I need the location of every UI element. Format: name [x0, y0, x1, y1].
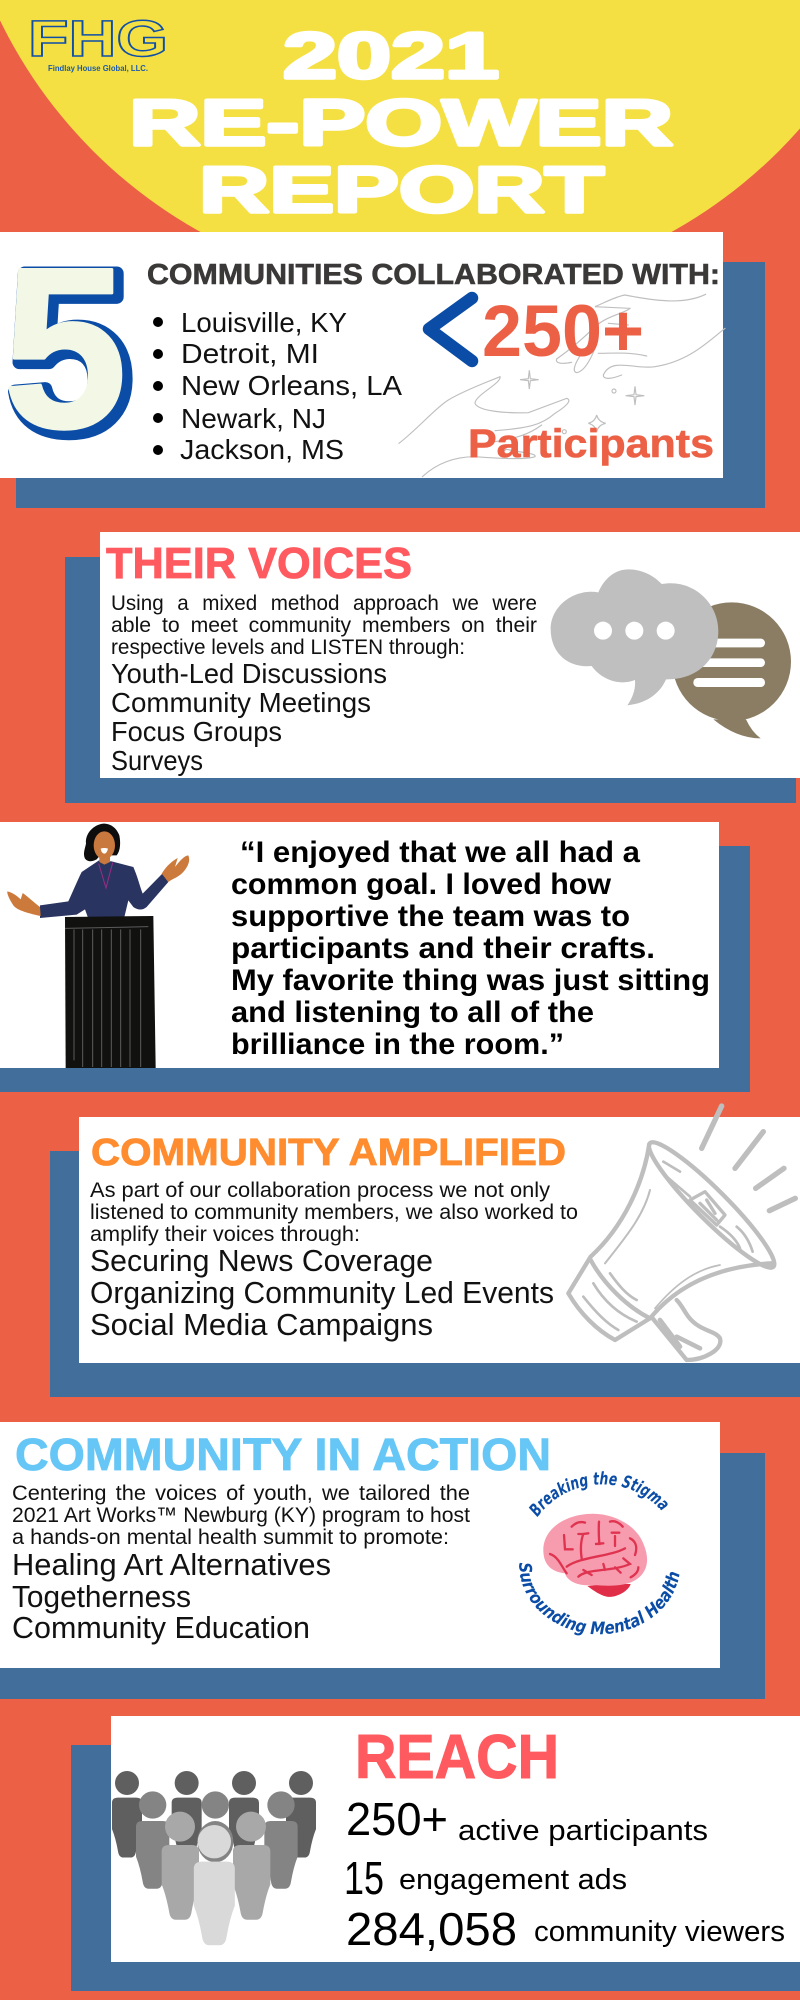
list of cities: Detroit, MI: [181, 338, 319, 369]
heading: their voices: THEIR VOICES: [106, 539, 412, 588]
list: amplification methods: Securing News Coverage: [90, 1243, 433, 1278]
text: collaboration description: As part of our collaboration process we not only: [90, 1179, 551, 1202]
icon: crowd of people: [112, 1771, 316, 1945]
quote text: supportive the team was to: [231, 900, 630, 933]
header: yellow semicircle: [0, 0, 800, 293]
quote text: [231, 836, 710, 1061]
text: collaboration description: [90, 1179, 578, 1246]
label: participants: Participants: [468, 422, 714, 466]
text: program description: Centering the voices of youth, we tailored the: [12, 1482, 470, 1505]
list of cities: Louisville, KY: [181, 307, 347, 338]
icon: brain badge with circular text: [519, 1471, 680, 1636]
list: listening methods: Surveys: [111, 745, 203, 776]
stat: community viewers: community viewers: [534, 1916, 785, 1948]
icon: brain badge with circular text: Surrounding Mental Health: [519, 1562, 680, 1636]
list: amplification methods: Organizing Community Led Events: [90, 1275, 554, 1310]
quote text: and listening to all of the: [231, 996, 594, 1029]
list: listening methods: [111, 658, 387, 776]
quote text: common goal. I loved how: [231, 868, 612, 901]
logo: Findlay House Global: [28, 10, 168, 73]
text: method description: Using a mixed method approach we were: [111, 592, 537, 615]
heading: communities collaborated: COMMUNITIES COLLABORATED WITH:: [147, 259, 720, 291]
title: REPORT: [199, 153, 604, 226]
panel: community in action: [0, 1422, 765, 1699]
text: program description: [12, 1482, 470, 1549]
text: method description: able to meet community members on their: [111, 614, 537, 637]
stat: active participants: [346, 1793, 708, 1847]
panel: testimonial quote: [0, 822, 750, 1092]
list: listening methods: Community Meetings: [111, 687, 371, 718]
list: summit goals: Healing Art Alternatives: [12, 1547, 331, 1582]
text: method description: respective levels and LISTEN through:: [111, 636, 465, 659]
list of cities: Newark, NJ: [181, 403, 326, 434]
quote text: My favorite thing was just sitting: [231, 964, 710, 997]
text: method description: [111, 592, 537, 659]
icon: less-than chevron: [429, 298, 472, 361]
illustration: speaker at podium: [7, 824, 189, 1068]
list: amplification methods: [90, 1243, 554, 1342]
title: 2021: [283, 19, 499, 92]
icon: brain badge with circular text: Breaking the Stigma: [528, 1471, 668, 1517]
heading: reach: REACH: [355, 1723, 559, 1792]
panel: community amplified: [50, 1106, 800, 1397]
text: collaboration description: amplify their voices through:: [90, 1223, 360, 1246]
list of cities: Jackson, MS: [180, 434, 344, 465]
text: program description: a hands-on mental health summit to promote:: [12, 1526, 449, 1549]
stat: engagement ads: 15: [344, 1852, 384, 1904]
list: summit goals: Community Education: [12, 1610, 310, 1645]
panel: their voices: [65, 532, 800, 803]
stat: active participants: active participants: [458, 1815, 708, 1847]
stat: community viewers: [346, 1903, 785, 1955]
text: collaboration description: listened to community members, we also worked to: [90, 1201, 578, 1224]
panel: communities: [0, 220, 765, 508]
big number 5: 5: [8, 224, 132, 480]
list: listening methods: Youth-Led Discussions: [111, 658, 387, 689]
heading: community in action: COMMUNITY IN ACTION: [15, 1429, 551, 1480]
big number 5: 5: [3, 220, 127, 476]
list: summit goals: Togetherness: [12, 1579, 191, 1614]
panel: reach: [71, 1716, 800, 1991]
stat: 250+: 250+: [482, 291, 644, 372]
list: summit goals: [12, 1547, 331, 1645]
icon: reaching hands: [399, 294, 725, 477]
list of cities: New Orleans, LA: [181, 370, 402, 401]
logo: Findlay House Global: FHG: [28, 10, 168, 67]
stat: engagement ads: [344, 1852, 627, 1904]
stat: community viewers: 284,058: [346, 1903, 517, 1955]
title: RE-POWER: [129, 86, 673, 159]
quote text: brilliance in the room.”: [231, 1028, 564, 1061]
list: amplification methods: Social Media Campaigns: [90, 1307, 433, 1342]
stat: engagement ads: engagement ads: [399, 1864, 627, 1896]
quote text: “I enjoyed that we all had a: [240, 836, 640, 869]
title: [129, 19, 673, 226]
icon: speech bubbles: [551, 569, 791, 738]
icon: megaphone: [568, 1106, 795, 1360]
heading: community amplified: COMMUNITY AMPLIFIED: [91, 1132, 566, 1174]
quote text: participants and their crafts.: [231, 932, 655, 965]
list of cities: [153, 307, 402, 465]
logo: Findlay House Global: Findlay House Global, LLC.: [48, 63, 148, 73]
list: listening methods: Focus Groups: [111, 716, 282, 747]
stat: active participants: 250+: [346, 1793, 448, 1845]
text: program description: 2021 Art Works™ Newburg (KY) program to host: [12, 1504, 470, 1527]
